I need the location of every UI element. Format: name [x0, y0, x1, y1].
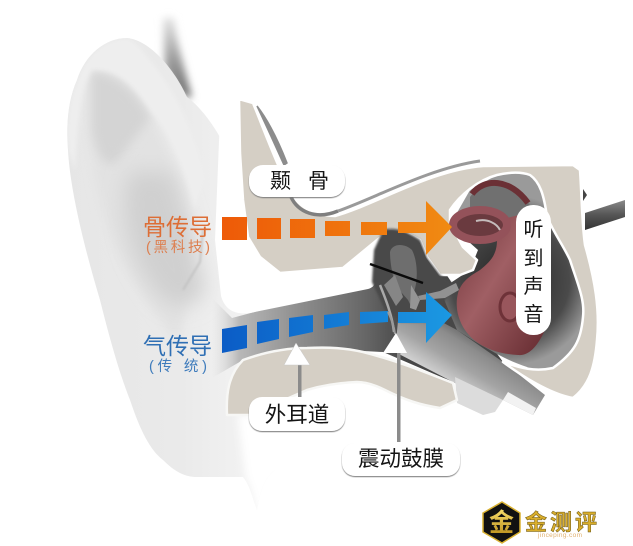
- black pointer line: [370, 264, 423, 283]
- label: air conduction: [143, 333, 212, 375]
- air conduction arrow: [222, 292, 452, 353]
- bone: temporal bone section: [215, 88, 598, 415]
- icon: shield: [483, 502, 520, 543]
- malleus and incus: [390, 245, 417, 308]
- lower bone: [227, 348, 457, 415]
- label: air conduction: (传 统): [149, 358, 207, 375]
- eustachian tube: [395, 300, 545, 415]
- cochlea coil: [500, 293, 520, 321]
- head shadow behind ear: [163, 18, 192, 98]
- label: ear canal: [249, 397, 345, 431]
- wordmark: 金测评: [525, 510, 597, 535]
- bone conduction arrow: [222, 201, 452, 255]
- label: temporal bone: 颞: [270, 170, 291, 193]
- grey shadow along bone edge: [257, 106, 287, 165]
- label: ear canal: 外耳道: [265, 403, 329, 427]
- arrow: ear canal pointer: [284, 343, 310, 398]
- label: temporal bone: [249, 165, 345, 197]
- white tissue block: [215, 88, 375, 313]
- label: vibrating eardrum: 震动鼓膜: [358, 447, 444, 471]
- lateral canal loop: [453, 210, 507, 240]
- logo: gold shield and wordmark: [483, 502, 597, 543]
- outer ear: [67, 38, 250, 480]
- upper canal arc: [470, 184, 530, 225]
- website: jinceping.com: [537, 532, 582, 539]
- label: vibrating eardrum: [342, 443, 460, 476]
- cochlea and semicircular canals: [453, 183, 545, 355]
- label: bone conduction: 骨传导: [143, 214, 212, 240]
- eardrum: [380, 285, 394, 332]
- middle ear cavity and ossicles: [370, 229, 459, 332]
- ear canal: [212, 225, 503, 400]
- label: hearing sound: [516, 205, 551, 335]
- earphone wire: [583, 189, 625, 230]
- shield glyph: 金: [489, 509, 514, 537]
- label: bone conduction: (黑科技): [146, 239, 210, 256]
- arrow: eardrum pointer: [383, 333, 407, 442]
- label: temporal bone: 骨: [308, 170, 329, 193]
- label: air conduction: 气传导: [143, 333, 212, 359]
- label: hearing sound: 音: [524, 303, 544, 326]
- stapes: [418, 283, 459, 300]
- label: hearing sound: 声: [524, 275, 544, 298]
- inner ear cavity: [440, 173, 583, 369]
- label: hearing sound: 听: [524, 218, 544, 241]
- label: hearing sound: 到: [524, 247, 544, 270]
- upper bone: [239, 99, 598, 398]
- label: bone conduction: [143, 214, 212, 256]
- eardrum re-stroke over arrow: [388, 312, 395, 334]
- cochlea body: [457, 212, 545, 355]
